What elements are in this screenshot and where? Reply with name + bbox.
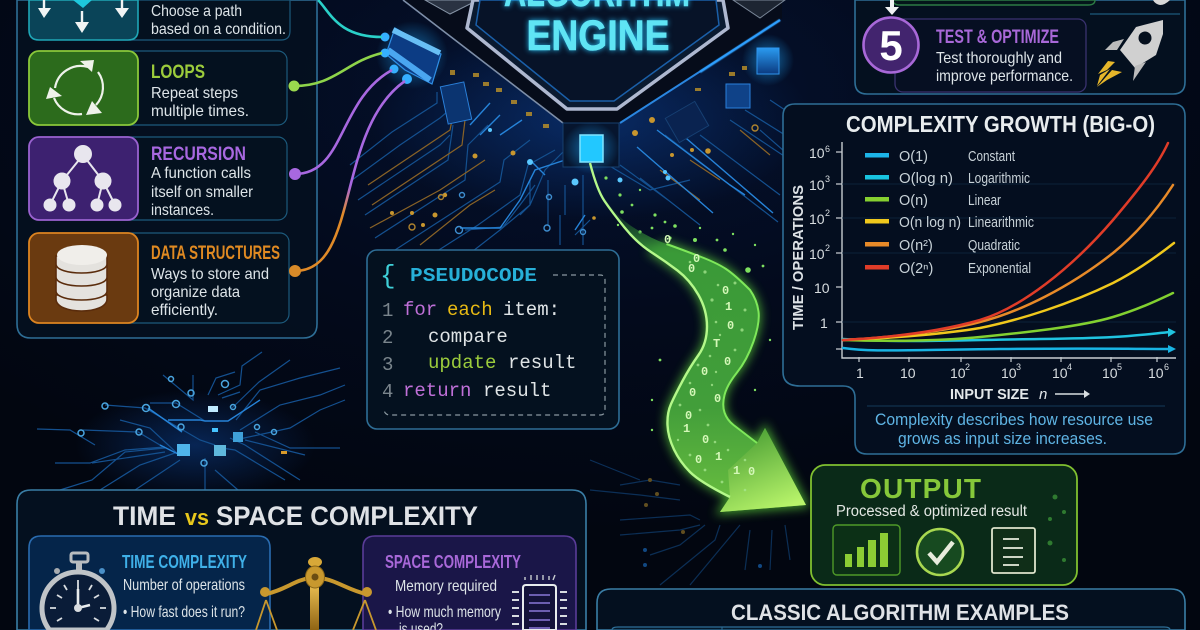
icon: tree bbox=[44, 146, 120, 210]
row: loops: LOOPS bbox=[151, 62, 205, 83]
code lines: 3 bbox=[382, 354, 393, 376]
legend: Logarithmic bbox=[968, 171, 1030, 187]
axes and tick labels: 10 bbox=[1148, 365, 1164, 381]
icon: balance scale bbox=[256, 557, 376, 630]
code lines: each bbox=[447, 299, 493, 321]
chart note bbox=[875, 411, 1153, 448]
legend: O(2ⁿ) bbox=[899, 261, 933, 277]
icon: partly visible tool bbox=[1153, 0, 1170, 5]
row: decisions: based on a condition. bbox=[151, 21, 286, 38]
row: recursion: A function calls bbox=[151, 165, 251, 182]
code lines: result bbox=[483, 380, 551, 402]
icon: cycle arrows bbox=[46, 60, 103, 115]
binary digits: 1 bbox=[683, 422, 690, 436]
legend: Quadratic bbox=[968, 238, 1020, 254]
icon: check mark bbox=[917, 529, 963, 575]
time complexity card: TIME COMPLEXITY bbox=[122, 552, 247, 572]
binary digits: 0 bbox=[693, 252, 700, 266]
binary digits: 0 bbox=[727, 319, 734, 333]
binary digits: 0 bbox=[722, 284, 729, 298]
output heading: OUTPUT bbox=[860, 473, 981, 504]
panel: test and optimize: TEST & OPTIMIZE bbox=[936, 27, 1059, 48]
hexagon plate bbox=[467, 0, 728, 109]
code lines: 2 bbox=[382, 327, 393, 349]
icon: database bbox=[56, 245, 107, 311]
legend: O(log n) bbox=[899, 171, 953, 187]
axes and tick labels: 10 bbox=[1001, 365, 1017, 381]
chart note: grows as input size increases. bbox=[898, 430, 1107, 448]
y axis title: TIME / OPERATIONS bbox=[790, 185, 807, 330]
arrow glow bbox=[651, 244, 806, 512]
algorithm engine chip bbox=[376, 0, 794, 174]
row: recursion: instances. bbox=[151, 202, 214, 219]
left connector block bbox=[376, 21, 448, 89]
binary digits: 1 bbox=[715, 450, 722, 464]
space complexity card: SPACE COMPLEXITY bbox=[385, 552, 521, 572]
legend bbox=[865, 149, 1034, 277]
binary digits: 0 bbox=[714, 392, 721, 406]
heading: vs bbox=[185, 505, 209, 530]
chart heading: COMPLEXITY GROWTH (BIG-O) bbox=[846, 111, 1155, 137]
binary digits: 1 bbox=[733, 464, 740, 478]
binary digits bbox=[664, 233, 755, 479]
icon: bar chart bbox=[833, 525, 900, 575]
row: recursion bbox=[29, 137, 287, 220]
axes and tick labels: 10 bbox=[1102, 365, 1118, 381]
panel: output: Processed & optimized result bbox=[836, 503, 1028, 520]
row: data structures: organize data bbox=[151, 284, 240, 301]
row: loops bbox=[29, 51, 287, 125]
code lines: update bbox=[428, 352, 496, 374]
space complexity card bbox=[363, 536, 576, 630]
x axis title bbox=[950, 386, 1090, 403]
x axis title: INPUT SIZE bbox=[950, 386, 1029, 403]
panel: output bbox=[811, 465, 1077, 585]
code lines: result bbox=[508, 352, 576, 374]
icon: branching arrows bbox=[38, 0, 129, 33]
step 5 badge bbox=[864, 18, 918, 72]
heading bbox=[504, 0, 690, 60]
heading: CLASSIC ALGORITHM EXAMPLES bbox=[731, 600, 1069, 625]
axes and tick labels: 2 bbox=[825, 243, 830, 253]
heading: ENGINE bbox=[526, 12, 670, 60]
panel: test and optimize: improve performance. bbox=[936, 68, 1073, 85]
binary digits: 0 bbox=[689, 386, 696, 400]
heading: TIME bbox=[113, 501, 176, 531]
space complexity card: • How much memory bbox=[388, 604, 501, 621]
circuit traces below engine bbox=[350, 20, 810, 265]
axes and tick labels bbox=[809, 142, 1176, 381]
axes and tick labels: 6 bbox=[1164, 362, 1169, 372]
axes and tick labels: 10 bbox=[950, 365, 966, 381]
row: recursion: RECURSION bbox=[151, 144, 246, 165]
binary digits: 0 bbox=[695, 453, 702, 467]
panel: time vs space complexity bbox=[17, 490, 586, 630]
legend: O(1) bbox=[899, 149, 928, 165]
legend: O(n log n) bbox=[899, 215, 961, 231]
background circuit: around output bbox=[590, 460, 790, 585]
panel: test and optimize bbox=[855, 0, 1185, 94]
icon: down arrow bbox=[885, 0, 899, 15]
row: data structures bbox=[29, 233, 289, 323]
legend: Constant bbox=[968, 149, 1015, 165]
background circuit: lower left bbox=[37, 352, 345, 500]
binary digits: 0 bbox=[685, 409, 692, 423]
binary digits: 0 bbox=[664, 233, 671, 247]
legend: O(n²) bbox=[899, 238, 933, 254]
icon: document bbox=[992, 528, 1035, 573]
legend: Linear bbox=[968, 193, 1001, 209]
panel: pseudocode bbox=[367, 250, 619, 429]
time complexity card: • How fast does it run? bbox=[123, 604, 245, 621]
icon: stopwatch bbox=[42, 553, 114, 630]
heading: SPACE COMPLEXITY bbox=[216, 501, 478, 531]
legend: O(n) bbox=[899, 193, 928, 209]
data particles bbox=[604, 176, 771, 431]
row: decisions: Choose a path bbox=[151, 3, 242, 20]
icon: brace: { bbox=[380, 261, 396, 291]
pseudocode heading: PSEUDOCODE bbox=[410, 265, 537, 287]
chart note: Complexity describes how resource use bbox=[875, 411, 1153, 429]
side modules bbox=[440, 82, 472, 124]
row: loops: multiple times. bbox=[151, 103, 249, 120]
time complexity card: Number of operations bbox=[123, 577, 245, 594]
arrow body bbox=[590, 163, 806, 512]
axes and tick labels: 6 bbox=[825, 144, 830, 154]
output port bbox=[563, 122, 619, 174]
code lines bbox=[382, 299, 576, 403]
axes and tick labels: 3 bbox=[1016, 362, 1021, 372]
icon: memory chip bbox=[512, 575, 567, 630]
x axis title: n bbox=[1039, 386, 1047, 403]
row: loops: Repeat steps bbox=[151, 85, 238, 102]
row: recursion: itself on smaller bbox=[151, 184, 254, 201]
arrow head bbox=[720, 428, 806, 512]
axes and tick labels: 10 bbox=[900, 365, 916, 381]
row: data structures: DATA STRUCTURES bbox=[151, 243, 280, 264]
row: data structures: Ways to store and bbox=[151, 266, 269, 283]
axes and tick labels: 2 bbox=[965, 362, 970, 372]
legend: Exponential bbox=[968, 261, 1031, 277]
panel: classic algorithm examples bbox=[597, 589, 1185, 630]
code lines: compare bbox=[428, 326, 508, 348]
row: data structures: efficiently. bbox=[151, 302, 218, 319]
axes and tick labels: 10 bbox=[809, 145, 825, 161]
binary digits: 0 bbox=[748, 465, 755, 479]
axes and tick labels: 3 bbox=[825, 174, 830, 184]
time complexity card bbox=[29, 536, 270, 630]
binary digits: 0 bbox=[724, 355, 731, 369]
speckle bbox=[677, 261, 746, 491]
code lines: item: bbox=[503, 299, 560, 321]
code lines: for bbox=[403, 299, 437, 321]
axes and tick labels: 4 bbox=[1067, 362, 1072, 372]
axes and tick labels: 10 bbox=[809, 211, 825, 227]
binary digits: 0 bbox=[701, 365, 708, 379]
axes and tick labels: 5 bbox=[1117, 362, 1122, 372]
panel: test and optimize: Test thoroughly and bbox=[936, 50, 1062, 67]
axes and tick labels: 10 bbox=[809, 177, 825, 193]
panel: programming concepts bbox=[17, 0, 317, 338]
chip body bbox=[403, 0, 782, 123]
arrow edges bbox=[590, 163, 759, 497]
heading bbox=[113, 501, 478, 531]
panel: complexity growth chart bbox=[783, 104, 1185, 454]
small top plates bbox=[425, 0, 478, 14]
space complexity card: Memory required bbox=[395, 578, 497, 595]
code lines: 1 bbox=[382, 300, 393, 322]
binary digits: T bbox=[713, 337, 720, 351]
axes and tick labels: 10 bbox=[809, 246, 825, 262]
axes and tick labels: 1 bbox=[856, 365, 864, 381]
code lines: return bbox=[403, 380, 471, 402]
green data flow arrow bbox=[590, 163, 806, 512]
axes and tick labels: 2 bbox=[825, 208, 830, 218]
icon: rocket bbox=[1097, 20, 1163, 87]
axes and tick labels: 10 bbox=[814, 280, 830, 296]
axes and tick labels: 1 bbox=[820, 315, 828, 331]
step 5 badge: 5 bbox=[879, 22, 903, 69]
legend: Linearithmic bbox=[968, 215, 1034, 231]
row: decisions bbox=[29, 0, 290, 40]
growth curves bbox=[843, 143, 1176, 353]
axes and tick labels: 10 bbox=[1052, 365, 1068, 381]
binary digits: 1 bbox=[725, 300, 732, 314]
binary digits: 0 bbox=[702, 433, 709, 447]
binary digits: 0 bbox=[688, 262, 695, 276]
code lines: 4 bbox=[382, 381, 393, 403]
connector wires bbox=[288, 0, 405, 277]
